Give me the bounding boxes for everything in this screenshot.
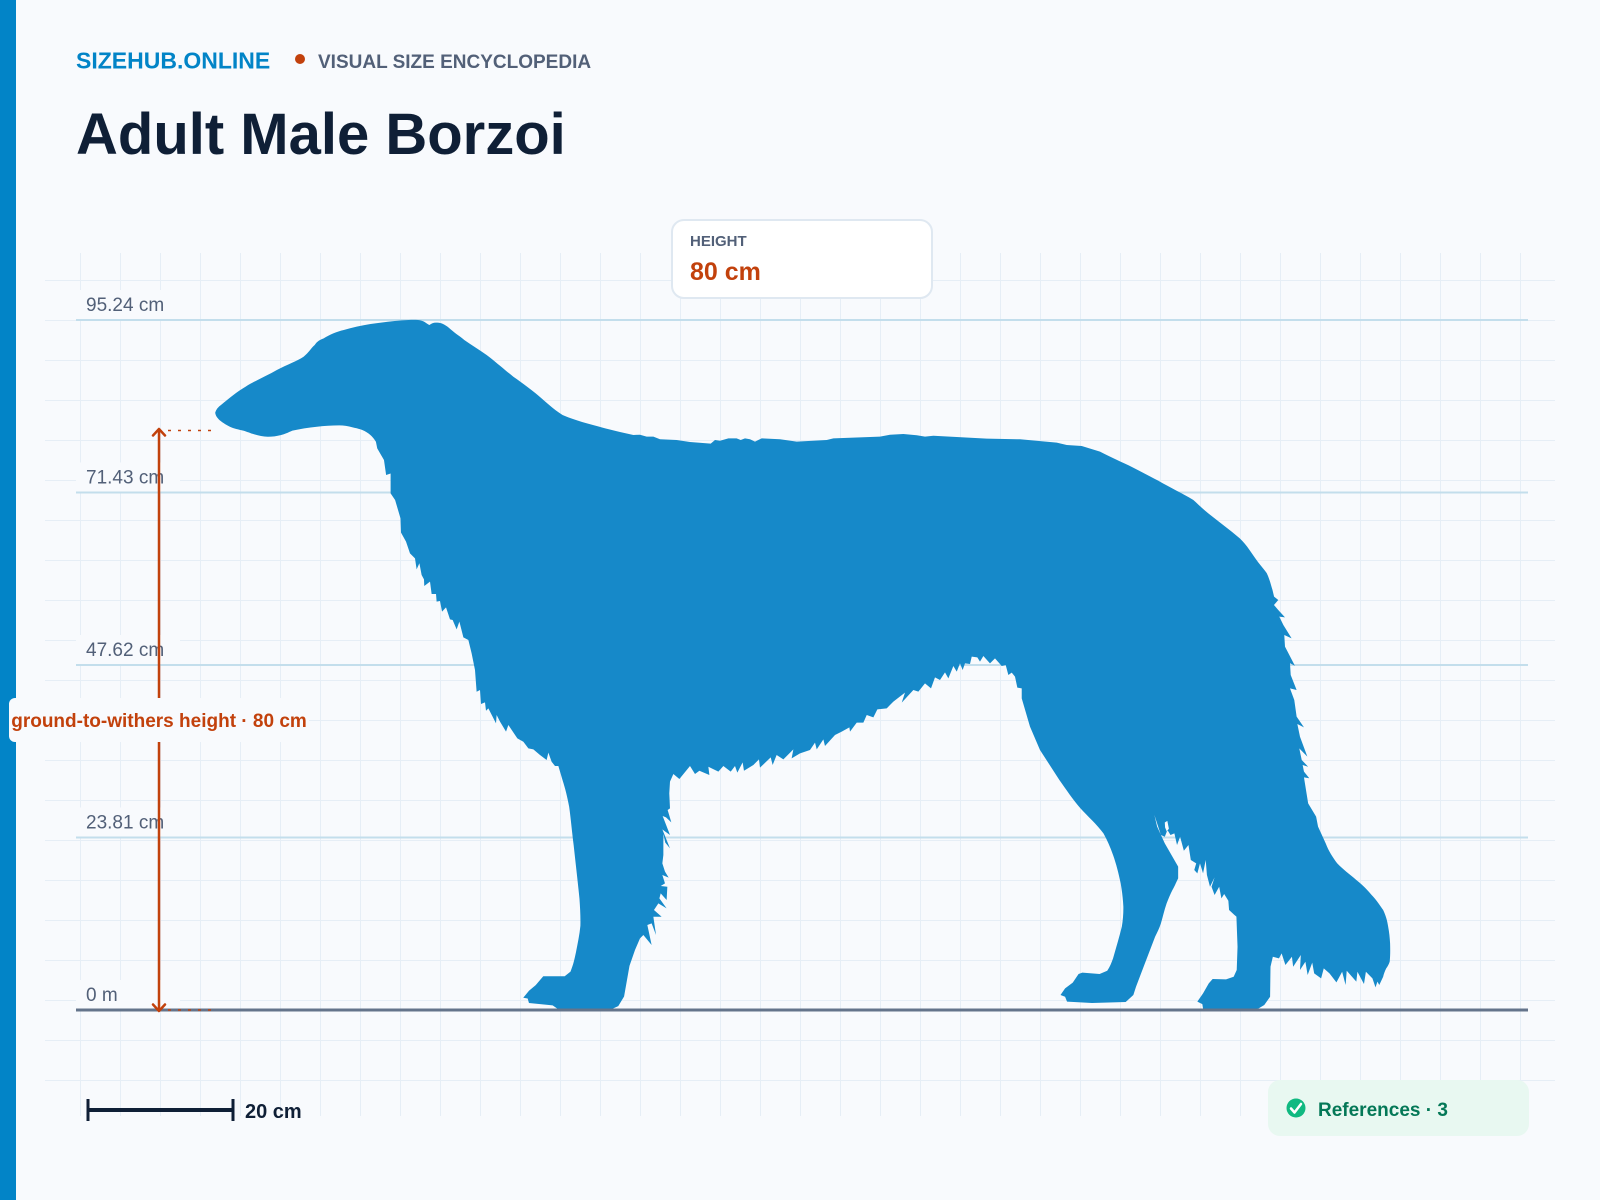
borzoi silhouette xyxy=(215,320,1390,1010)
scale bar xyxy=(88,1099,302,1123)
height card xyxy=(672,220,932,298)
measurement label: ground-to-withers height · 80 cm xyxy=(11,711,307,732)
y axis scale: reference lines and labels: 0 m xyxy=(86,985,118,1006)
icon: check mark xyxy=(1286,1098,1306,1118)
height card: 80 cm xyxy=(690,258,761,286)
y axis scale: reference lines and labels: 95.24 cm xyxy=(86,295,164,316)
scale bar: 20 cm xyxy=(245,1101,302,1123)
header: brand line xyxy=(76,48,591,74)
y axis scale: reference lines and labels: 71.43 cm xyxy=(86,468,164,488)
y axis scale: reference lines and labels xyxy=(76,290,1528,1010)
references badge xyxy=(1268,1080,1529,1136)
title: Adult Male Borzoi xyxy=(76,102,566,167)
references badge: References · 3 xyxy=(1318,1100,1448,1121)
header: brand line: SIZEHUB.ONLINE xyxy=(76,48,270,74)
header: brand line: VISUAL SIZE ENCYCLOPEDIA xyxy=(318,52,591,73)
measurement label xyxy=(9,698,309,742)
height card: HEIGHT xyxy=(690,233,747,250)
ground line xyxy=(76,1008,1528,1012)
height measurement arrow xyxy=(153,429,214,1011)
left accent bar xyxy=(0,0,16,1200)
y axis scale: reference lines and labels: 47.62 cm xyxy=(86,640,164,661)
y axis scale: reference lines and labels: 23.81 cm xyxy=(86,812,164,834)
